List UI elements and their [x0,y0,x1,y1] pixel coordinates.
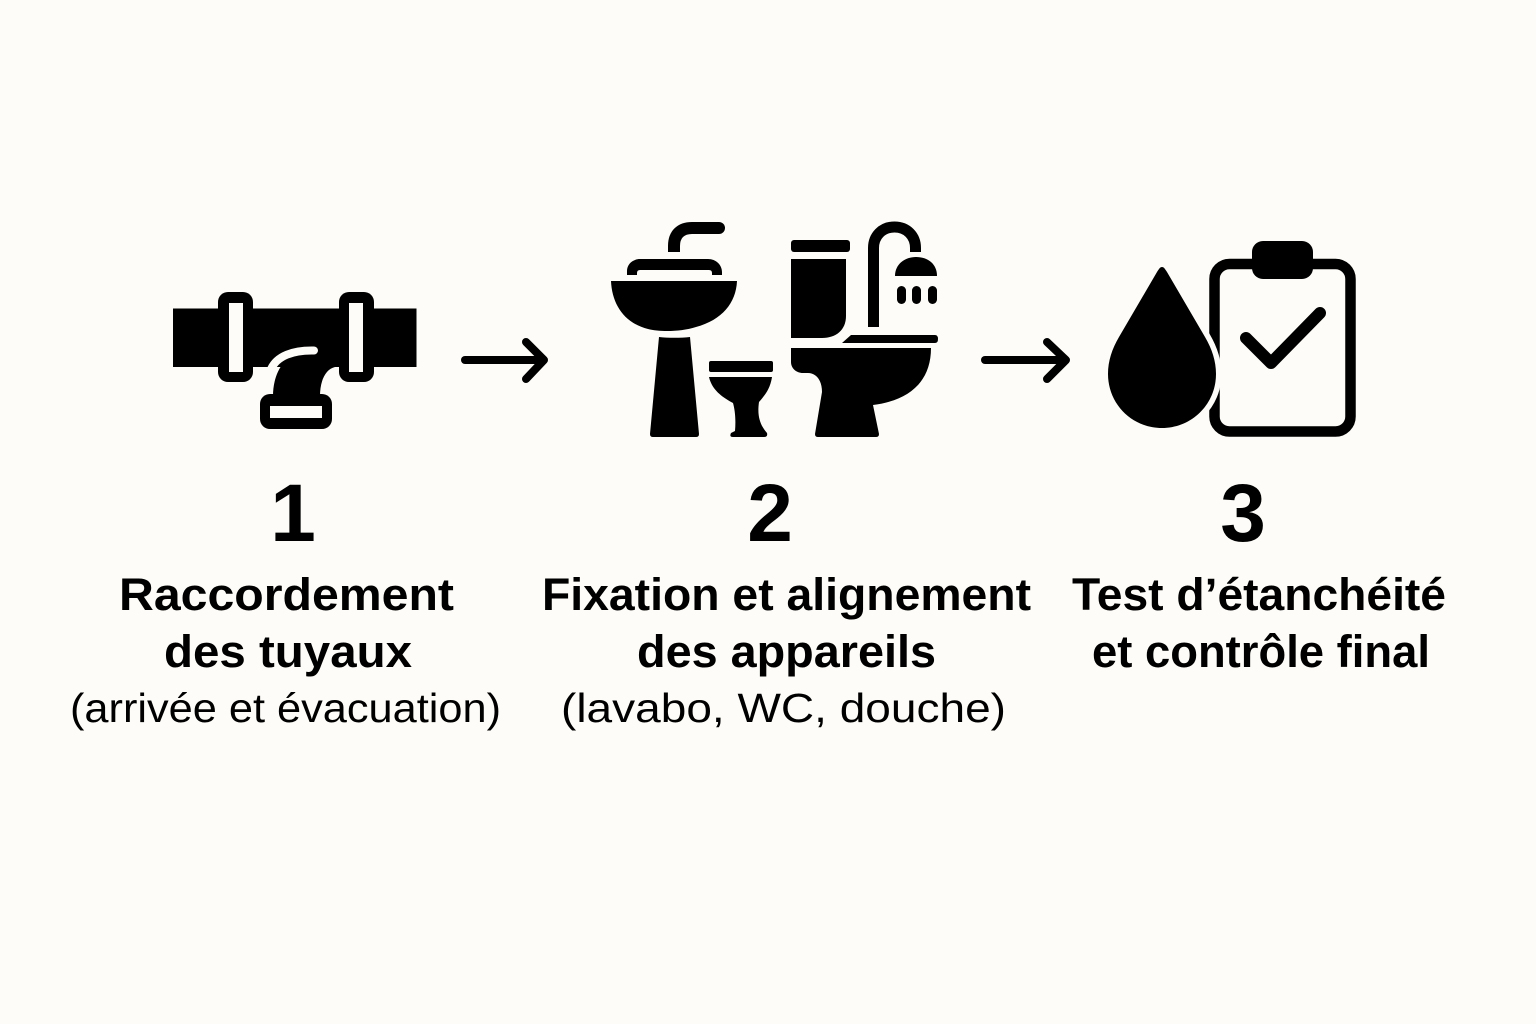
step 1: pipe connection [70,292,501,731]
heading: Test d'étanchéité et contrôle final: et contrôle final [1092,626,1430,677]
step number 1: 1 [270,468,316,559]
heading: Raccordement des tuyaux: des tuyaux [164,626,412,677]
heading: Fixation et alignement des appareils [542,569,1031,677]
heading: Test d'étanchéité et contrôle final [1072,569,1446,677]
small toilet [709,361,773,437]
subtext: arrivée et évacuation: (arrivée et évacuation) [70,685,501,731]
heading: Fixation et alignement des appareils: des appareils [637,626,936,677]
heading: Raccordement des tuyaux: Raccordement [119,569,454,620]
icon: water drop [1108,267,1216,428]
icon: clipboard with check mark [1214,241,1350,432]
step number 2: 2 [747,468,793,559]
step 3: leak test [1072,241,1446,677]
icon: sink, small toilet, toilet and shower [611,222,938,437]
icon: pipe with flanges and elbow [173,292,416,429]
heading: Test d'étanchéité et contrôle final: Test d’étanchéité [1072,569,1446,620]
heading: Raccordement des tuyaux [119,569,454,677]
arrow from step 2 to step 3 [985,342,1066,379]
heading: Fixation et alignement des appareils: Fixation et alignement [542,569,1031,620]
step 2: fixtures [542,222,1031,731]
step number 3: 3 [1220,468,1266,559]
sink [611,222,737,437]
subtext: lavabo, WC, douche: (lavabo, WC, douche) [561,685,1006,731]
shower [874,227,937,327]
arrow from step 1 to step 2 [465,342,544,379]
large toilet [791,240,938,437]
